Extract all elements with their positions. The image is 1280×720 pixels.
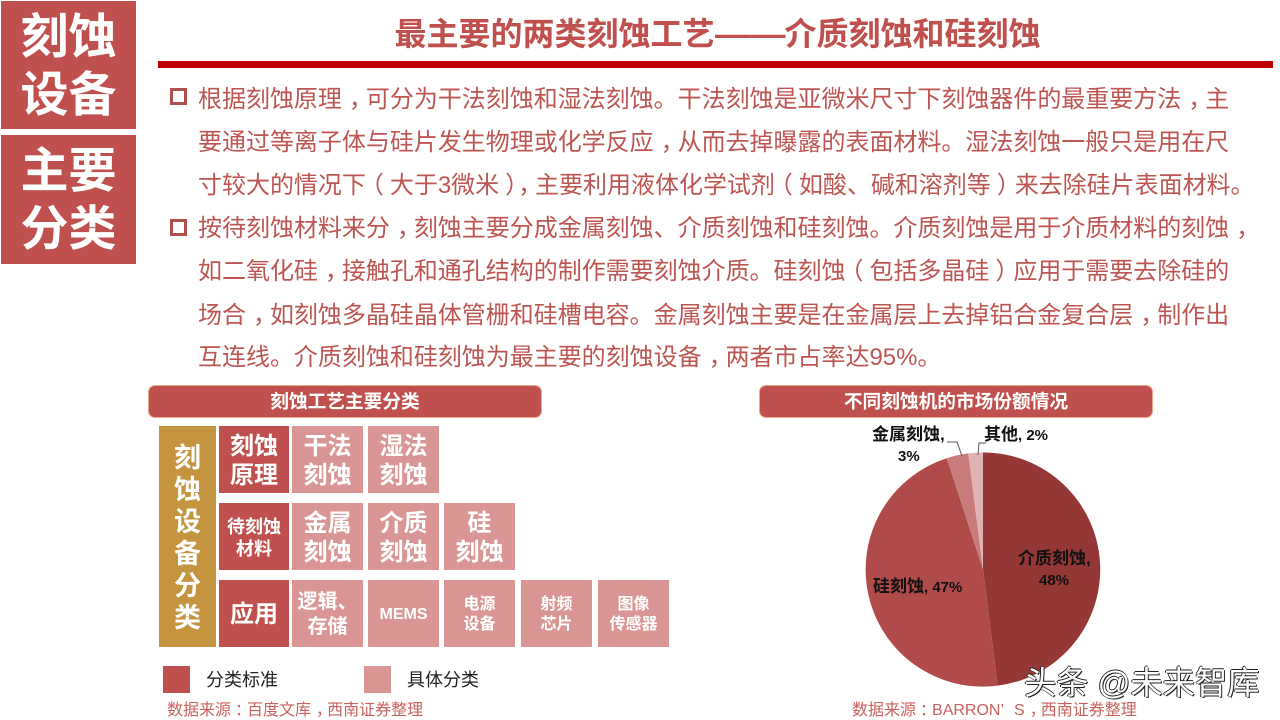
lines 1: 要通过等离子体与硅片发生物理或化学反应 ，从而去掉曝露的表面材料。湿法刻蚀一般只是用在尺: [198, 129, 1229, 156]
cell: 逻辑、: [298, 590, 358, 612]
gold column: 蚀: [174, 474, 201, 504]
classification table: [159, 426, 669, 647]
cell: 金属: [304, 510, 352, 536]
gold column: 类: [174, 602, 201, 632]
bullet 2: [170, 219, 187, 236]
row: principle: [219, 426, 289, 493]
lines 1: 根据刻蚀原理 ，可分为干法刻蚀和湿法刻蚀。干法刻蚀是亚微米尺寸下刻蚀器件的最重要方法 ，主: [198, 86, 1229, 113]
cell: 设备: [463, 616, 496, 632]
lines 2: [198, 215, 1260, 371]
side label: 刻蚀设备: 设备: [20, 69, 116, 122]
cell: MEMS: [380, 606, 428, 622]
side label: 主要分类: 主要: [20, 145, 116, 198]
cell: 图像: [617, 596, 650, 612]
lines 2: 场合 ，如刻蚀多晶硅晶体管栅和硅槽电容。金属刻蚀主要是在金属层上去掉铝合金复合层 ，制作出: [198, 302, 1229, 329]
source right: 数据来源：BARRON’S ，西南证券整理: [852, 702, 1137, 719]
title rule: [158, 61, 1273, 68]
cell: [368, 580, 439, 647]
row: material: [219, 503, 289, 570]
row: application: [219, 580, 289, 647]
source left: 数据来源：百度文库 ，西南证券整理: [167, 702, 423, 719]
cell: [598, 580, 669, 647]
lines 2: 按待刻蚀材料来分 ，刻蚀主要分成金属刻蚀、介质刻蚀和硅刻蚀。介质刻蚀是用于介质材料的刻蚀 ，: [198, 215, 1260, 242]
bullet 1: [170, 88, 187, 105]
pie chart: 介质刻蚀,: [1018, 548, 1091, 568]
pie chart: 3%: [898, 448, 920, 465]
cell: 刻蚀: [304, 538, 352, 566]
legend label: 具体分类: [407, 670, 479, 690]
gold column: 刻: [174, 442, 201, 472]
cell: 刻蚀: [380, 462, 428, 488]
cell: 刻蚀: [380, 538, 428, 566]
text block: etched materials: [170, 215, 1260, 371]
side label: 刻蚀设备: [1, 1, 136, 129]
cell: 湿法: [380, 432, 428, 460]
heading: etching process classification: 刻蚀工艺主要分类: [270, 391, 420, 412]
cell: [444, 580, 515, 647]
row: application: 应用: [230, 601, 278, 628]
cell: [444, 503, 515, 570]
title: ——: [714, 16, 785, 52]
row: principle: 原理: [230, 462, 278, 488]
heading: market share: [759, 385, 1153, 418]
legend swatch: standard: [163, 666, 190, 693]
cell: 存储: [308, 616, 348, 638]
gold column: [159, 426, 216, 647]
side label: 主要分类: 分类: [20, 203, 116, 256]
cell: 干法: [304, 432, 352, 460]
title: 最主要的两类刻蚀工艺 介质刻蚀和硅刻蚀: [394, 16, 1041, 52]
cell: [521, 580, 592, 647]
row: principle: 刻蚀: [230, 432, 278, 460]
legend label: 分类标准: [206, 670, 278, 690]
heading: etching process classification: [148, 385, 542, 418]
row: material: 待刻蚀: [227, 516, 281, 536]
heading: market share: 不同刻蚀机的市场份额情况: [844, 391, 1068, 412]
cell: 传感器: [609, 616, 658, 632]
pie chart: 48%: [1039, 572, 1069, 589]
watermark: 头条 @未来智库: [1024, 665, 1260, 701]
gold column: 设: [174, 506, 201, 536]
row: material: 材料: [236, 538, 272, 558]
cell: 刻蚀: [456, 538, 504, 566]
lines 2: 如二氧化硅 ，接触孔和通孔结构的制作需要刻蚀介质。硅刻蚀（包括多晶硅）应用于需要去除硅的: [198, 258, 1229, 285]
cell: [292, 503, 363, 570]
cell: [368, 503, 439, 570]
gold column: 备: [174, 538, 201, 568]
cell: 电源: [463, 596, 496, 612]
lines 2: 互连线。介质刻蚀和硅刻蚀为最主要的刻蚀设备 ，两者市占率达95%。: [198, 344, 941, 371]
pie chart: 金属刻蚀,: [872, 424, 945, 444]
cell: 芯片: [540, 616, 572, 632]
side label: 刻蚀设备: 刻蚀: [20, 11, 116, 64]
lines 1: [198, 86, 1255, 199]
cell: [292, 426, 363, 493]
cell: 硅: [468, 510, 492, 536]
cell: 介质: [380, 510, 428, 536]
gold column: 分: [174, 570, 201, 600]
text block: etching principles: [170, 86, 1255, 199]
side label: 主要分类: [1, 135, 136, 264]
cell: 射频: [540, 596, 572, 612]
cell: 刻蚀: [304, 462, 352, 488]
pie chart: 硅刻蚀, 47%: [873, 576, 962, 596]
pie chart: 其他, 2%: [984, 425, 1048, 444]
cell: [292, 580, 363, 647]
lines 1: 寸较大的情况下（大于3微米），主要利用液体化学试剂（如酸、碱和溶剂等）来去除硅片表面材料。: [198, 172, 1255, 199]
cell: [368, 426, 439, 493]
legend swatch: category: [364, 666, 391, 693]
